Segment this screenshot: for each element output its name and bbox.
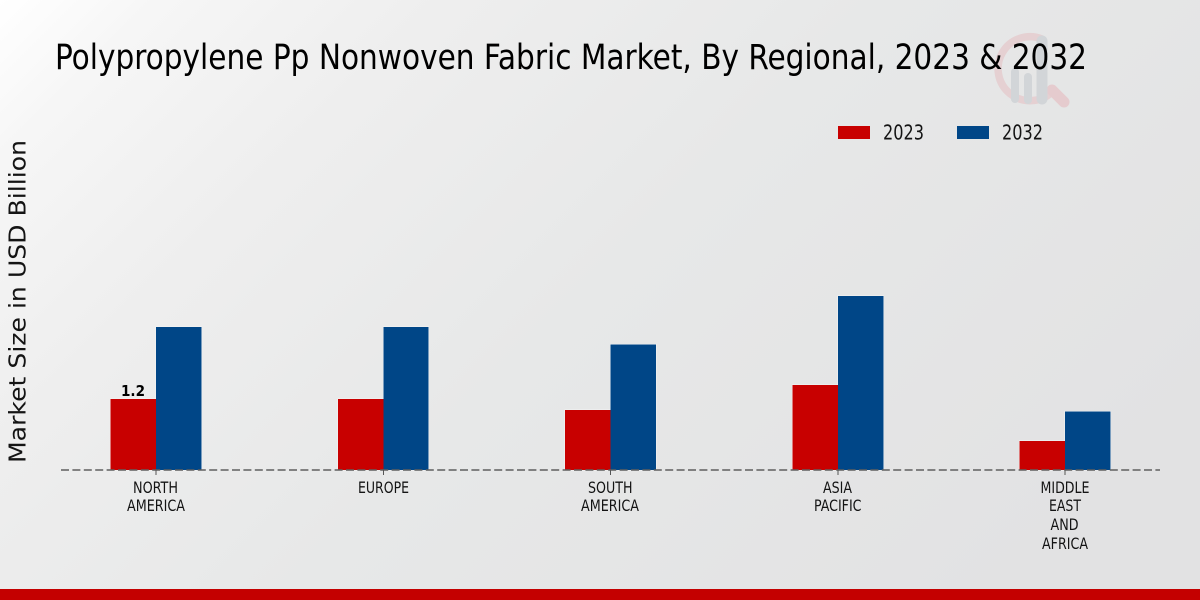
x label: South America: [581, 478, 639, 515]
legend item: 2023: [838, 120, 924, 144]
x label: North America: AMERICA: [127, 496, 185, 515]
legend: [838, 120, 1043, 144]
bars: South America: [565, 344, 656, 470]
x label: Asia Pacific: [814, 478, 862, 515]
legend item: 2032: 2032: [1002, 120, 1043, 144]
x label: Europe: EUROPE: [358, 478, 409, 497]
x axis: [61, 470, 1160, 475]
x label: Middle East and Africa: MIDDLE: [1040, 478, 1090, 497]
bars: Middle East and Africa: [1020, 412, 1110, 470]
legend item: 2032: [957, 120, 1043, 144]
x label: Middle East and Africa: AND: [1050, 515, 1078, 534]
x label: Asia Pacific: PACIFIC: [814, 496, 862, 515]
bars: Europe: [338, 327, 428, 470]
x label: Asia Pacific: ASIA: [823, 478, 852, 497]
bars: North America: [110, 327, 202, 470]
icon: watermark logo: [998, 37, 1064, 102]
x label: South America: SOUTH: [588, 478, 632, 497]
title: Polypropylene Pp Nonwoven Fabric Market, By Regional, 2023 & 2032: [55, 38, 1087, 78]
bars: Asia Pacific: [792, 296, 884, 470]
x label: South America: AMERICA: [581, 496, 639, 515]
legend item: 2023: 2023: [883, 120, 924, 144]
footer bar: [0, 589, 1200, 600]
bar chart: [61, 296, 1160, 553]
x label: North America: [127, 478, 185, 515]
x label: North America: NORTH: [133, 478, 178, 497]
y axis label: Market Size in USD Billion: [6, 140, 32, 463]
value label: 1.2: [121, 382, 145, 400]
x label: Middle East and Africa: [1040, 478, 1090, 553]
x label: Middle East and Africa: EAST: [1049, 496, 1081, 515]
x label: Middle East and Africa: AFRICA: [1042, 534, 1088, 553]
